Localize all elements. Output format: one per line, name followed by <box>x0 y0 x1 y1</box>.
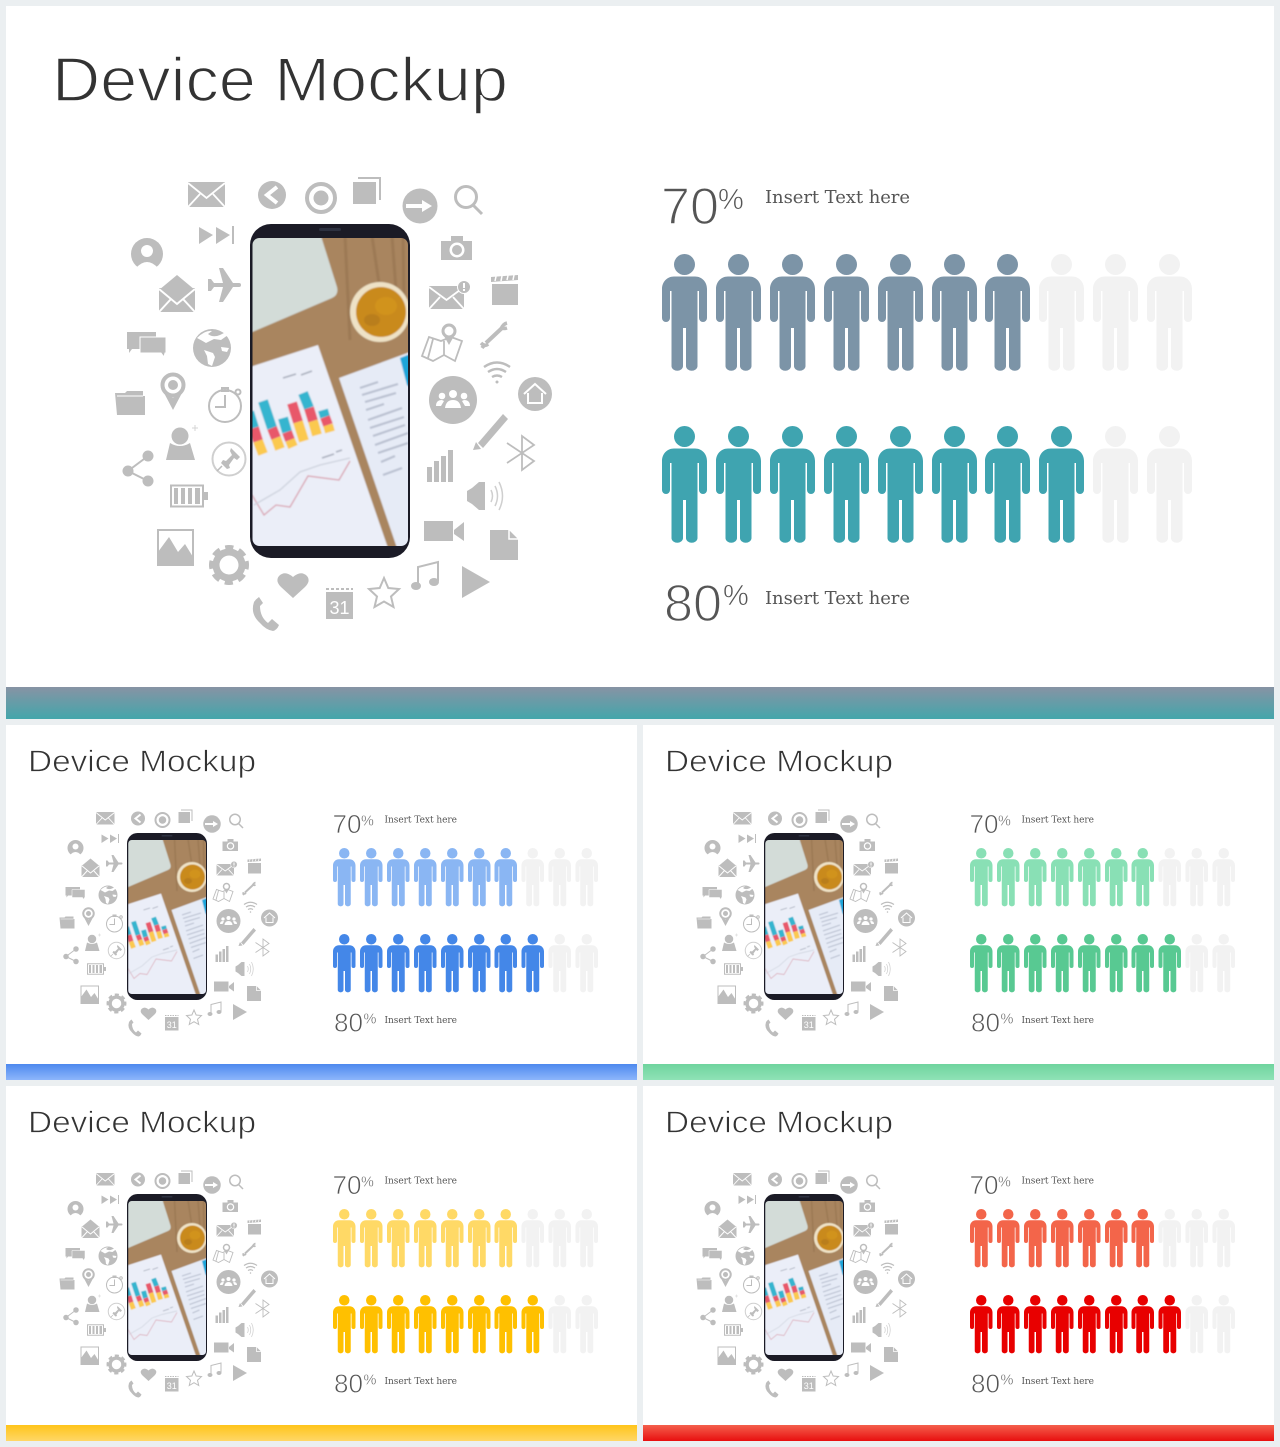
phone screen photo <box>249 236 410 548</box>
icon: clapperboard <box>491 275 518 305</box>
label: first stat: Insert Text here <box>1022 816 1094 826</box>
people row: 70% <box>333 848 598 906</box>
stat: 70%: 70 <box>661 178 719 236</box>
icon: arrow circle <box>402 188 438 224</box>
icon: wifi <box>484 362 510 384</box>
stat: 80%: 80 <box>971 1368 1000 1398</box>
stat: 70%: % <box>718 184 744 216</box>
icon: airplane <box>208 268 241 302</box>
stat: 80% <box>334 1368 376 1398</box>
stat: 80%: 80 <box>664 575 722 633</box>
label: first stat: Insert Text here <box>384 1176 457 1186</box>
panel: blue slide <box>6 725 637 1064</box>
title: Device Mockup <box>28 1104 256 1140</box>
icon: battery <box>171 486 208 506</box>
stat: 80% <box>971 1368 1014 1398</box>
icon: back <box>258 181 286 209</box>
band: main slide <box>6 687 1274 719</box>
panel: yellow slide <box>6 1086 637 1425</box>
people row: 80% <box>662 426 1192 543</box>
icon: pencil <box>473 414 508 450</box>
title: Device Mockup <box>665 1104 893 1140</box>
icon: signal bars <box>427 450 453 482</box>
icon cluster <box>60 810 278 1036</box>
title: Device Mockup <box>52 46 508 115</box>
label: second stat: Insert Text here <box>1022 1016 1094 1026</box>
panel: green slide <box>643 725 1274 1064</box>
panel: red slide <box>643 1086 1274 1425</box>
icon cluster <box>696 1171 915 1398</box>
label: second stat: Insert Text here <box>384 1016 457 1026</box>
icon: mail alert <box>429 280 470 309</box>
stat: 80%: 80 <box>971 1008 1000 1038</box>
stat: 70%: % <box>361 814 374 830</box>
band: yellow <box>6 1425 637 1441</box>
icon: gear <box>208 544 250 586</box>
stat: 80%: 80 <box>334 1368 363 1398</box>
icon cluster <box>60 1171 278 1398</box>
icon cluster <box>696 810 915 1036</box>
stat: 70%: 70 <box>970 809 998 839</box>
band: red <box>643 1425 1274 1441</box>
stat: 70%: 70 <box>332 809 362 839</box>
stat: 80%: % <box>364 1372 376 1388</box>
icon: stopwatch <box>209 388 241 422</box>
icon: image <box>158 530 193 565</box>
stat: 80%: % <box>1000 1012 1014 1028</box>
stat: 70% <box>970 1170 1011 1200</box>
label: first stat: Insert Text here <box>384 816 457 826</box>
icon: people circle <box>429 376 477 424</box>
icon: location <box>162 374 184 410</box>
label: second stat: Insert Text here <box>1022 1377 1094 1387</box>
icon: pushpin <box>212 442 246 476</box>
stat: 80%: 80 <box>334 1008 363 1038</box>
people row: 80% <box>970 934 1235 992</box>
people row: 70% <box>970 848 1235 906</box>
stat: 70%: 70 <box>970 1170 998 1200</box>
icon: heart <box>277 573 309 598</box>
phone mockup <box>126 1194 207 1361</box>
icon: star <box>369 578 399 607</box>
label: second stat: Insert Text here <box>384 1377 457 1387</box>
people row: 80% <box>970 1295 1235 1353</box>
icon: folder <box>115 391 145 415</box>
phone mockup <box>764 1194 844 1361</box>
icon: bluetooth <box>507 436 534 470</box>
icon: globe <box>193 329 231 367</box>
stat: 70%: % <box>998 1174 1011 1190</box>
icon cluster <box>115 178 552 631</box>
phone mockup <box>126 833 207 1000</box>
icon: share <box>122 450 154 486</box>
stat: 80%: % <box>364 1012 376 1028</box>
icon: calendar: 31 <box>329 598 350 618</box>
icon: target <box>307 184 335 212</box>
phone mockup <box>764 833 844 1000</box>
icon: open mail <box>159 275 195 312</box>
people row: 70% <box>662 254 1192 371</box>
icon: camera <box>441 236 472 260</box>
icon: mail <box>188 182 225 207</box>
icon: search <box>456 186 482 214</box>
people row: 70% <box>970 1209 1235 1267</box>
band: green <box>643 1064 1274 1080</box>
stat: 70% <box>332 809 374 839</box>
stat: 70% <box>970 809 1011 839</box>
icon: speaker <box>467 482 502 510</box>
icon: file <box>490 530 518 560</box>
icon: chat <box>127 332 166 357</box>
people row: 80% <box>333 934 598 992</box>
label: second stat: Insert Text here <box>765 588 910 609</box>
stat: 80%: % <box>723 580 749 612</box>
band: blue <box>6 1064 637 1080</box>
stat: 70%: 70 <box>332 1170 362 1200</box>
icon: copy <box>353 178 380 204</box>
icon: wrench <box>481 323 507 348</box>
panel: main slide <box>6 6 1274 687</box>
people row: 80% <box>333 1295 598 1353</box>
title: Device Mockup <box>665 744 893 778</box>
icon: calendar <box>326 589 353 619</box>
icon: house circle <box>518 377 552 411</box>
icon: phone <box>253 597 279 631</box>
icon: play <box>462 566 490 598</box>
title: Device Mockup <box>28 744 256 778</box>
stat: 70%: % <box>361 1174 374 1190</box>
label: first stat: Insert Text here <box>1022 1176 1094 1186</box>
icon: video camera <box>424 521 464 541</box>
stat: 70%: % <box>998 814 1011 830</box>
stat: 80% <box>334 1008 376 1038</box>
people row: 70% <box>333 1209 598 1267</box>
icon: fast forward <box>199 226 234 244</box>
phone mockup <box>249 224 410 558</box>
stat: 80% <box>971 1008 1014 1038</box>
label: first stat: Insert Text here <box>765 187 910 208</box>
icon: music note <box>411 562 439 590</box>
stat: 70% <box>332 1170 374 1200</box>
icon: map pin <box>422 325 462 361</box>
icon: add user <box>166 425 198 460</box>
icon: profile <box>131 238 163 273</box>
stat: 70% <box>661 178 744 236</box>
stat: 80% <box>664 575 749 633</box>
phone body <box>250 224 410 558</box>
stat: 80%: % <box>1000 1372 1014 1388</box>
